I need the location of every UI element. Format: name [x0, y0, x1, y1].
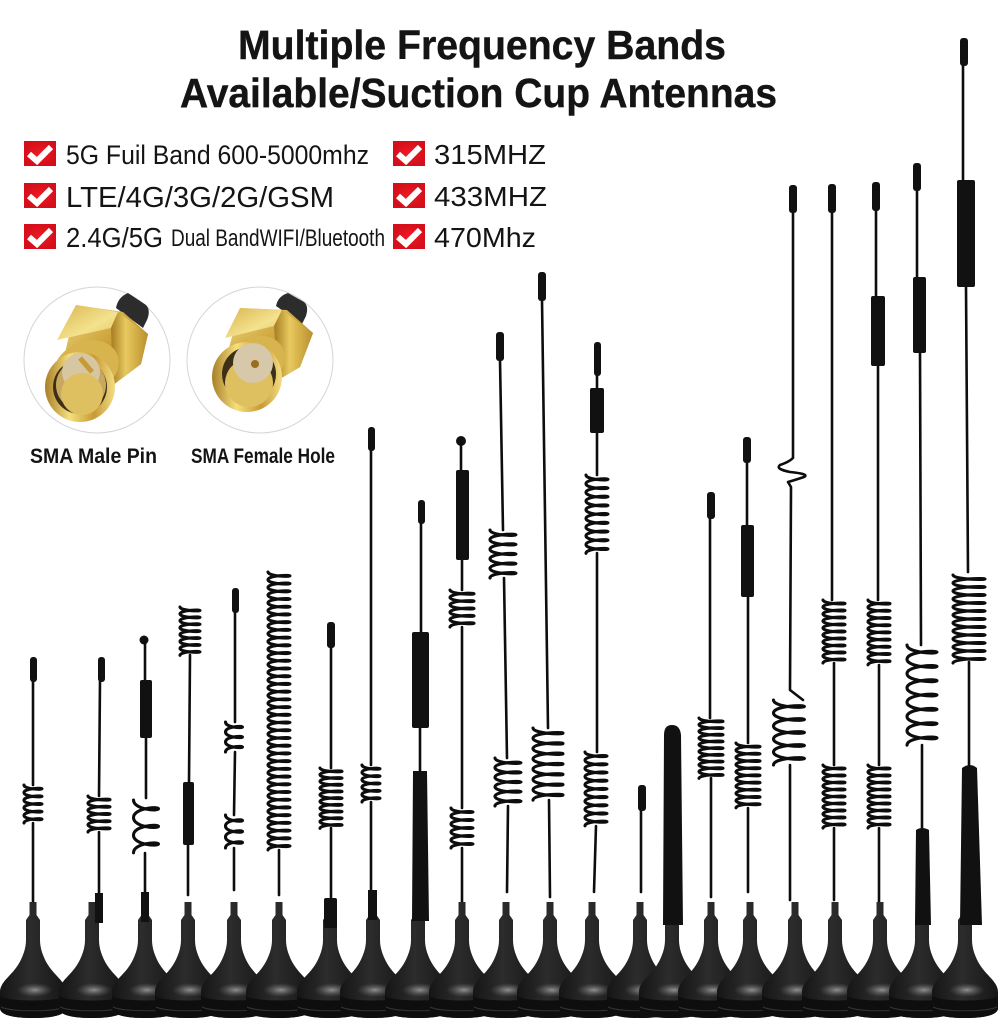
antenna 5 — [201, 588, 267, 1018]
antenna 3 — [112, 636, 178, 1018]
label: SMA male pin: SMA Male Pin — [30, 445, 157, 468]
antenna 14 — [607, 785, 673, 1018]
antenna 8 — [340, 427, 406, 1018]
item: dual band: Dual BandWIFI/Bluetooth — [171, 225, 385, 252]
antenna 12 — [517, 272, 583, 1018]
antenna 19 — [802, 184, 868, 1018]
item: 315MHZ: 315MHZ — [434, 139, 546, 170]
item: dual band: 2.4G/5G — [66, 222, 163, 253]
connector: SMA female hole — [187, 287, 333, 433]
connector: SMA male pin — [24, 287, 170, 433]
antenna 9 — [385, 500, 451, 1018]
item: LTE: LTE/4G/3G/2G/GSM — [66, 182, 334, 214]
antenna 2 — [59, 657, 125, 1018]
antenna 22 — [932, 38, 998, 1018]
antenna 16 — [678, 492, 744, 1018]
antenna 6 — [246, 572, 312, 1018]
antenna 18 — [762, 185, 828, 1018]
item: 433MHZ — [393, 181, 547, 212]
title: Available/Suction Cup Antennas — [180, 70, 777, 116]
antenna 17 — [717, 437, 783, 1018]
antenna 10 — [429, 436, 495, 1018]
title — [180, 22, 777, 116]
title: Multiple Frequency Bands — [238, 22, 726, 68]
item: 433MHZ: 433MHZ — [434, 181, 547, 212]
antenna 4 — [155, 607, 221, 1018]
item: 470Mhz — [393, 222, 536, 253]
antenna 11 — [473, 332, 539, 1018]
label: SMA female hole: SMA Female Hole — [191, 445, 335, 468]
feature checklist — [24, 139, 547, 253]
antenna 1 — [0, 657, 66, 1018]
antenna 7 — [297, 622, 363, 1018]
item: dual band — [24, 222, 385, 253]
antenna 15 — [639, 725, 705, 1018]
item: 470Mhz: 470Mhz — [434, 222, 536, 253]
antenna 21 — [889, 163, 955, 1018]
antenna 20 — [847, 182, 913, 1018]
item: 5G full band: 5G Fuil Band 600-5000mhz — [66, 140, 369, 170]
antenna 13 — [559, 342, 625, 1018]
